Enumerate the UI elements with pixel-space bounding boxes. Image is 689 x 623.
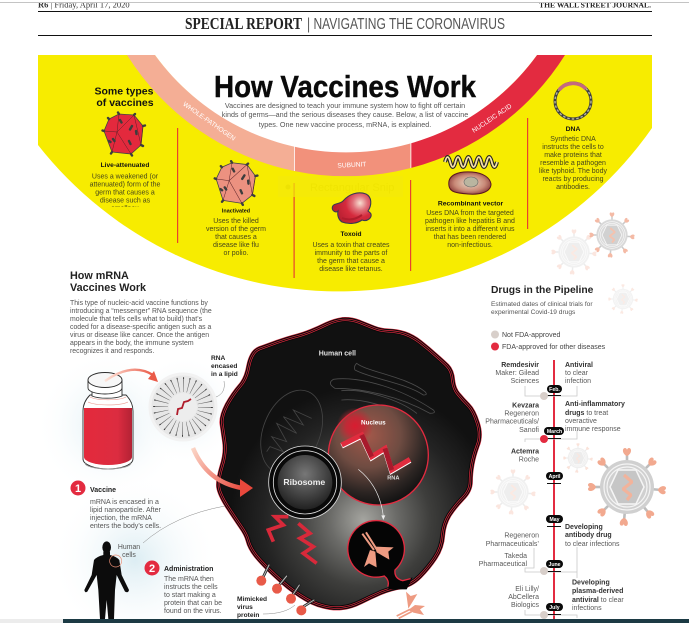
background glows xyxy=(35,350,240,623)
drug note: antiviral: to clear xyxy=(565,370,589,377)
bottom bar xyxy=(0,619,689,623)
mitochondrion xyxy=(249,381,334,482)
section header: SPECIAL REPORT xyxy=(185,14,303,33)
text: mRNA explanation: recognizes it and responds. xyxy=(70,348,154,355)
timeline month markers: April xyxy=(549,474,561,480)
label: mimicked virus protein: virus xyxy=(237,604,253,611)
label: human cells: cells xyxy=(122,552,136,559)
drug: Actemra: Roche xyxy=(519,456,539,464)
label: DNA: DNA xyxy=(566,126,580,133)
timeline month markers: Feb. xyxy=(549,387,560,393)
icon: vaccine vial xyxy=(83,372,133,469)
band label: subunit: SUBUNIT xyxy=(337,161,367,170)
text: toxoid: immunity to the parts of xyxy=(315,250,387,257)
callout: step 2 administration: instructs the cells xyxy=(164,584,218,591)
title: How Vaccines Work xyxy=(214,69,477,104)
icon: toxoid xyxy=(332,193,371,223)
drug: Remdesivir: Remdesivir xyxy=(501,362,539,369)
golgi apparatus xyxy=(330,363,434,417)
drug note: plasma antiviral: antiviral xyxy=(572,597,599,604)
callout: step 1 vaccine: enters the body’s cells. xyxy=(90,523,161,530)
drug note: anti-inflammatory: Anti-inflammatory xyxy=(565,401,625,408)
callout: step 1 vaccine: 1 xyxy=(75,483,81,495)
label: RNA encased in a lipid: RNA xyxy=(211,355,226,362)
top page rule xyxy=(0,2,689,3)
timeline month markers xyxy=(544,385,564,611)
label: recombinant vector: Recombinant vector xyxy=(438,200,504,208)
callout: step 2 administration: found on the virus. xyxy=(164,608,222,615)
drug note: plasma antiviral: Developing xyxy=(572,580,610,586)
label: nucleus: Nucleus xyxy=(361,420,386,427)
timeline xyxy=(525,360,577,619)
drug note: anti-inflammatory: immune response xyxy=(565,426,621,433)
text: mRNA explanation: appears in the body, the immune system xyxy=(70,340,194,347)
ghost screenshot tag xyxy=(278,176,403,197)
text: DNA: resemble a pathogen xyxy=(540,160,606,167)
panel: yellow vaccine types arc xyxy=(38,55,652,291)
text: mRNA explanation: molecule that tells cells what to build) that’s xyxy=(70,316,203,323)
text: recombinant vector: that has been rendered xyxy=(434,234,506,241)
drug: Kevzara: Kevzara xyxy=(512,402,539,410)
section header xyxy=(185,14,505,33)
text: live-attenuated: smallpox xyxy=(111,206,139,212)
protein strands xyxy=(268,517,317,563)
drug: Eli Lilly: AbCellera xyxy=(508,594,539,601)
dividers xyxy=(177,118,528,278)
text: DNA: like typhoid. The body xyxy=(539,168,607,175)
legend xyxy=(491,330,606,351)
text: inactivated: version of the germ xyxy=(206,226,266,233)
text: inactivated: or polio. xyxy=(224,250,249,257)
label: live-attenuated: Live-attenuated xyxy=(101,162,149,169)
text: live-attenuated: germ that causes a xyxy=(95,190,155,196)
drug note: antibody: to clear infections xyxy=(565,541,620,548)
callout: step 1 vaccine: lipid nanoparticle. After xyxy=(90,507,161,514)
text: mRNA explanation: virus or disease like cancer. Once the antigen xyxy=(70,332,209,339)
drug note: anti-inflammatory: to treat xyxy=(584,410,608,417)
text: inactivated: that causes a xyxy=(215,234,257,241)
text: inactivated: Uses the killed xyxy=(213,218,259,225)
text: DNA: make proteins that xyxy=(544,152,602,159)
drug: Kevzara: Pharmaceuticals/ xyxy=(485,418,539,426)
label: RNA encased in a lipid: in a lipid xyxy=(211,371,238,378)
intro text: Vaccines are designed to teach your immune system how to fight off certain xyxy=(225,101,465,110)
callout: step 2 administration xyxy=(144,560,222,615)
ribosome xyxy=(269,446,341,519)
text: toxoid: Uses a toxin that creates xyxy=(312,242,390,249)
intro text: types. One new vaccine process, mRNA, is explained. xyxy=(259,120,431,129)
arrow: RNA out of nucleus xyxy=(358,469,385,520)
text: recombinant vector: non-infectious. xyxy=(447,242,493,249)
drug note: antibody: antibody drug xyxy=(565,532,612,539)
label: RNA encased in a lipid: encased xyxy=(211,363,237,370)
heading: some types of vaccines: Some types xyxy=(95,86,154,98)
drug: Takeda: Takeda xyxy=(504,553,527,560)
text: DNA: reacts by producing xyxy=(542,176,604,183)
text: live-attenuated xyxy=(90,173,160,207)
drug: Takeda: Pharmaceutical xyxy=(479,561,527,568)
text: toxoid: disease like tetanus. xyxy=(319,266,383,273)
panel: human cell xyxy=(221,322,477,618)
text: pipeline intro: Estimated dates of clinical trials for xyxy=(491,301,593,308)
icon: inactivated virus xyxy=(213,160,258,206)
callout: step 1 vaccine xyxy=(70,480,161,530)
label: toxoid: Toxoid xyxy=(340,231,362,238)
text: pipeline intro: experimental Covid-19 drugs xyxy=(491,309,576,316)
spike proteins xyxy=(263,565,314,607)
drug: Remdesivir: Maker: Gilead xyxy=(495,370,539,377)
heading: drugs in the pipeline: Drugs in the Pipeline xyxy=(491,285,594,296)
drug note: plasma antiviral: infections xyxy=(572,605,602,612)
callout: step 1 vaccine: Vaccine xyxy=(90,487,116,494)
nucleus RNA ribbon xyxy=(342,435,410,471)
drug note: antibody: Developing xyxy=(565,524,603,531)
callout: step 2 administration: protein that can be xyxy=(164,600,222,607)
drug: Remdesivir: Sciences xyxy=(511,378,539,385)
drug note: plasma antiviral: plasma-derived xyxy=(572,588,623,595)
drug: Eli Lilly: Eli Lilly/ xyxy=(515,586,539,593)
decorative viruses xyxy=(490,212,666,526)
label: human cell: Human cell xyxy=(319,350,356,357)
legend: FDA-approved for other diseases xyxy=(502,344,606,351)
heading: some types of vaccines: of vaccines xyxy=(96,97,154,109)
drug note: plasma antiviral: to clear xyxy=(599,597,624,604)
free antibody xyxy=(397,592,425,618)
icon: RNA encased in lipid xyxy=(149,373,217,441)
timeline month markers: June xyxy=(548,562,561,568)
arc band: subunit xyxy=(294,143,411,176)
drug: Kevzara: Regeneron xyxy=(504,410,539,418)
text: recombinant vector: pathogen like hepatitis B and xyxy=(425,218,515,225)
arrow: vial to lipid xyxy=(105,370,158,382)
callout: step 2 administration: The mRNA then xyxy=(164,576,214,583)
text: DNA: instructs the cells to xyxy=(542,144,604,151)
label: mimicked virus protein: protein xyxy=(237,612,259,619)
band label: whole-pathogen: WHOLE-PATHOGEN xyxy=(181,101,237,143)
callout: step 2 administration: to start making a xyxy=(164,592,216,599)
intro text: kinds of germs—and the serious diseases they cause. Below, a list of vaccine xyxy=(222,110,468,119)
drug: Eli Lilly: Biologics xyxy=(511,602,539,609)
text: live-attenuated: disease such as xyxy=(100,198,151,204)
band label: nucleic acid: NUCLEIC ACID xyxy=(471,103,513,135)
drug note: anti-inflammatory: drugs xyxy=(565,410,585,417)
ghost screenshot tag: Rectangular Snip xyxy=(310,182,394,194)
icon: human silhouette xyxy=(84,541,129,619)
text: recombinant vector: inserts it into a different virus xyxy=(426,226,515,233)
drug note: antiviral: Antiviral xyxy=(565,362,593,369)
text: mRNA explanation: introducing a “messenger” RNA sequence (the xyxy=(70,308,212,315)
callout: step 2 administration: 2 xyxy=(149,563,155,575)
heading: how mRNA vaccines work: How mRNA xyxy=(70,270,129,282)
arrow: lipid into cell xyxy=(193,448,253,497)
timeline month markers: July xyxy=(549,605,560,611)
text: DNA: antibodies. xyxy=(556,184,590,191)
text: live-attenuated: attenuated) form of the xyxy=(90,182,161,188)
text: toxoid: the germ that cause a xyxy=(317,258,385,265)
icon: DNA ring xyxy=(555,83,591,119)
icon: live-attenuated virus xyxy=(102,112,145,156)
text: mRNA explanation: This type of nucleic-acid vaccine functions by xyxy=(70,300,208,307)
icon: recombinant vector xyxy=(445,157,497,194)
section header: | NAVIGATING THE CORONAVIRUS xyxy=(307,16,505,33)
arc band: whole-pathogen xyxy=(127,55,294,171)
label: human cells: Human xyxy=(118,544,140,551)
antibody bubble xyxy=(348,521,413,589)
heading: how mRNA vaccines work: Vaccines Work xyxy=(70,282,147,294)
newspaper name: THE WALL STREET JOURNAL. xyxy=(539,0,651,10)
drug: Actemra: Actemra xyxy=(511,448,539,456)
ribosome: Ribosome xyxy=(283,477,325,487)
legend: Not FDA-approved xyxy=(502,332,560,339)
text: inactivated: disease like flu xyxy=(213,242,259,249)
drug: Regeneron: Regeneron xyxy=(504,532,539,540)
drug note: antiviral: infection xyxy=(565,378,591,385)
timeline month markers: March xyxy=(547,429,562,435)
text: recombinant vector: Uses DNA from the targeted xyxy=(426,210,514,217)
label: mimicked virus protein: Mimicked xyxy=(237,596,267,603)
timeline month markers: May xyxy=(549,517,560,523)
callout: step 1 vaccine: injection, the mRNA xyxy=(90,515,152,522)
drug note: anti-inflammatory: overactive xyxy=(565,418,597,425)
label: inactivated: Inactivated xyxy=(222,208,250,214)
label: RNA: RNA xyxy=(387,476,399,482)
callout: step 1 vaccine: mRNA is encased in a xyxy=(90,499,159,506)
arc band: nucleic acid xyxy=(411,55,565,168)
text: mRNA explanation: coded for a disease-specific antigen such as a xyxy=(70,324,212,331)
nucleus xyxy=(328,405,428,505)
text: DNA: Synthetic DNA xyxy=(550,136,596,143)
drug: Regeneron: Pharmaceuticals’ xyxy=(486,541,539,548)
callout: step 2 administration: Administration xyxy=(164,566,213,573)
drug: Kevzara: Sanofi xyxy=(519,427,539,434)
text: live-attenuated: Uses a weakened (or xyxy=(92,174,159,180)
